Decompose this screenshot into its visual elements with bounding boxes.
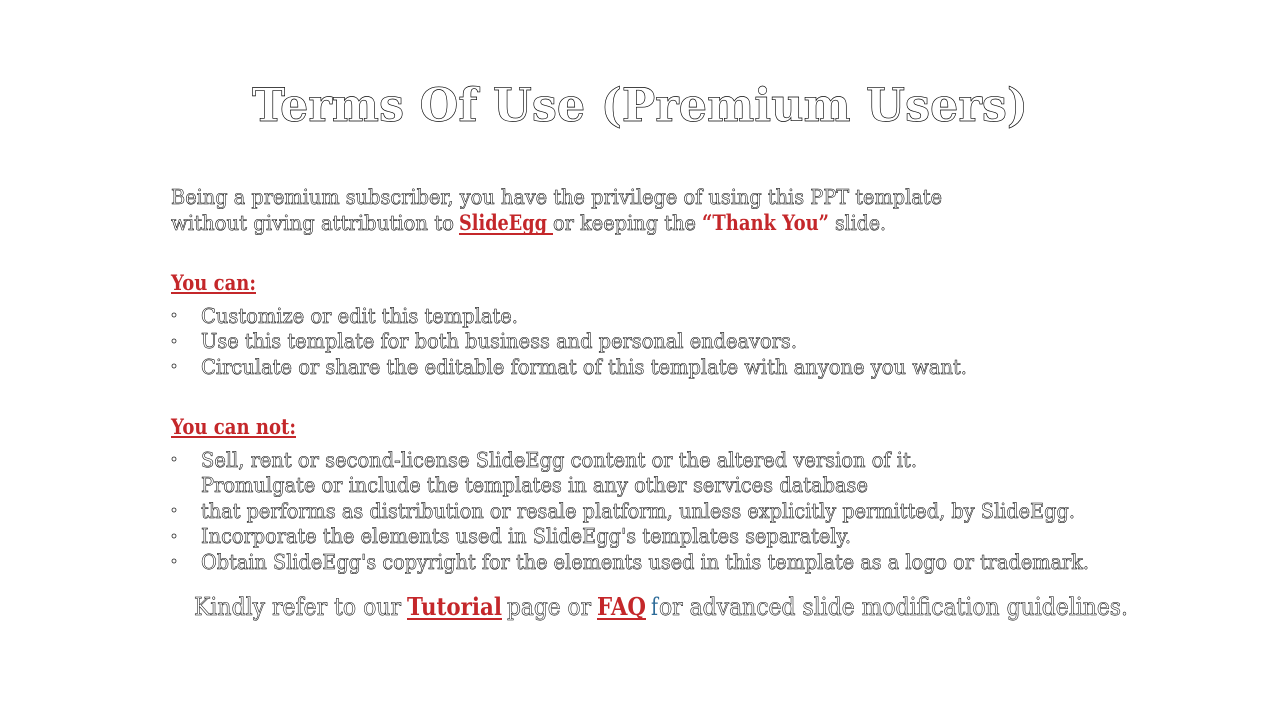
footer note [194,592,1128,621]
list: you can not: that performs as distribution or resale platform, unless explicitly permitted, by SlideEgg. [201,499,1075,523]
heading: you can not: You can not: [170,414,296,439]
list: you can not: Promulgate or include the templates in any other services database [201,473,868,497]
intro paragraph: slide. [835,211,886,235]
intro paragraph: SlideEgg [459,210,547,235]
footer note: Tutorial [407,592,502,621]
footer note: Kindly refer to our [194,593,401,621]
footer note: page or [507,593,591,621]
heading: you can: You can: [170,270,256,295]
list: you can [172,304,967,379]
list: you can not [172,448,1089,574]
intro paragraph: or keeping the [553,211,696,235]
list: you can: Circulate or share the editable format of this template with anyone you want. [201,355,967,379]
list: you can: Customize or edit this template. [201,304,518,328]
footer note: f [651,593,660,621]
footer note: FAQ [597,592,646,621]
footer note: or advanced slide modification guidelines. [659,593,1128,621]
intro paragraph: Being a premium subscriber, you have the privilege of using this PPT template [171,185,942,209]
list: you can not: Sell, rent or second-license SlideEgg content or the altered version of it. [201,448,917,472]
list: you can: Use this template for both business and personal endeavors. [201,329,797,353]
intro paragraph: without giving attribution to [171,211,454,235]
intro paragraph: “Thank You” [702,210,829,235]
list: you can not: Obtain SlideEgg's copyright for the elements used in this template as a logo or trademark. [201,550,1089,574]
list: you can not: Incorporate the elements used in SlideEgg's templates separately. [201,524,851,548]
intro paragraph [171,185,942,235]
title: Terms Of Use (Premium Users) [252,78,1028,132]
